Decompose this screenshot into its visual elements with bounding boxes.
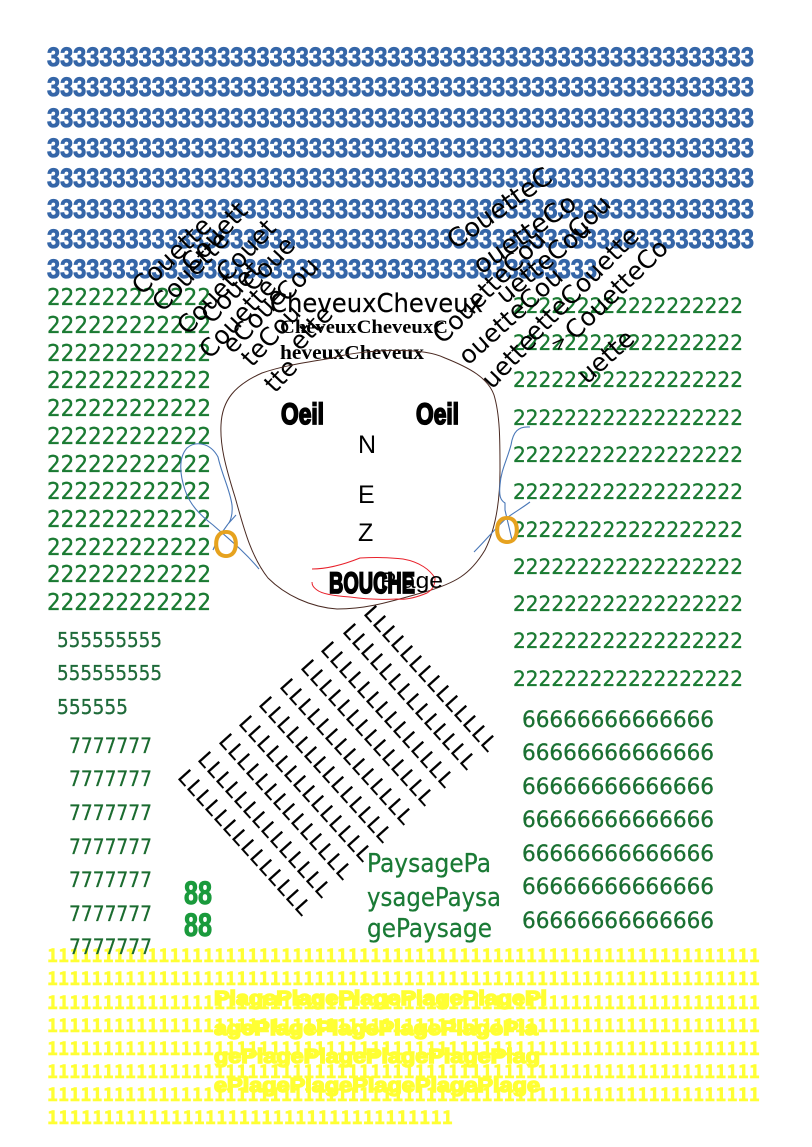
heading: Cheveux: [270, 289, 483, 364]
text block: fives: [57, 628, 162, 719]
heading: Cheveux: CheveuxCheveux: [270, 289, 483, 319]
text block: left green twos: 222222222222: [47, 396, 211, 422]
rotated text: left Couette: Couette: [126, 211, 217, 300]
label: left eye: Oeil: [281, 398, 324, 431]
rotated text: left Couette: Couett: [175, 196, 254, 277]
text block: sixes: [522, 708, 714, 934]
text block: left green twos: 222222222222: [47, 479, 211, 505]
text block: sevens: 7777777: [69, 868, 152, 892]
text block: sixes: 66666666666666: [522, 741, 714, 766]
text block: yellow Plage: ePlagePlagePlagePlagePlage: [214, 1075, 540, 1097]
text block: left green twos: 222222222222: [47, 590, 211, 616]
text block: sevens: 7777777: [69, 935, 152, 959]
rotated text: right Couette: >: [547, 330, 572, 356]
text block: blue threes: [47, 42, 754, 284]
text block: yellow ones: 1111111111111111111111111111111111111111111111111111111111111111: [47, 1011, 760, 1038]
text block: yellow Plage: [214, 988, 547, 1097]
text block: sevens: 7777777: [69, 734, 152, 758]
rotated text: right Couette: uette: [475, 326, 542, 394]
icon: left ear: [181, 444, 259, 569]
icon: right ear: [474, 427, 530, 552]
rotated text: block of L letters: LLLLLLLLLLLLLL: [296, 655, 440, 810]
text block: left green twos: 222222222222: [47, 368, 211, 394]
rotated text: left Couette: ette: [283, 299, 339, 356]
label: Plage over mouth: Plage: [380, 568, 443, 593]
text block: sevens: 7777777: [69, 902, 152, 926]
text block: eights: 88: [184, 907, 212, 943]
text block: yellow ones: 1111111111111111111111111111111111111111111111111111111111111111: [47, 1034, 760, 1061]
text block: yellow Plage: agePlagePlagePlagePlagePla: [214, 1018, 539, 1040]
text block: fives: 555555: [57, 695, 128, 719]
text block: left green twos: 222222222222: [47, 341, 211, 367]
rotated text: block of L letters: LLLLLLLLLLLLLL: [338, 619, 482, 774]
text block: right green twos: 222222222222222222: [513, 480, 743, 505]
text block: right green twos: 222222222222222222: [513, 368, 743, 393]
heading: Cheveux: heveuxCheveux: [280, 342, 424, 364]
text block: eights: [184, 875, 212, 943]
rotated text: left Couette: Cou: [270, 252, 325, 307]
text block: right green twos: 222222222222222222: [513, 629, 743, 654]
rotated text: block of L letters: LLLLLLLLLLLLLL: [193, 747, 337, 902]
rotated text: block of L letters: [173, 601, 503, 920]
rotated text: left Couette: Couette: [146, 225, 235, 317]
text block: Paysage: ysagePaysa: [367, 883, 501, 913]
icon: left orange ring: O: [213, 524, 239, 566]
text block: left green twos: 222222222222: [47, 424, 211, 450]
rotated text: block of L letters: LLLLLLLLLLLLLL: [234, 711, 378, 866]
text block: sixes: 66666666666666: [522, 875, 714, 900]
text block: left green twos: [47, 285, 211, 616]
label: nose: Z: [358, 519, 373, 547]
text block: sixes: 66666666666666: [522, 909, 714, 934]
rotated text: left Couette: eCoue: [216, 281, 292, 359]
text block: yellow ones: 1111111111111111111111111111111111111111111111111111111111111111: [47, 1080, 760, 1107]
text block: sixes: 66666666666666: [522, 708, 714, 733]
text block: sevens: 7777777: [69, 835, 152, 859]
text block: yellow ones: [47, 941, 760, 1130]
text block: fives: 555555555: [57, 661, 162, 685]
text block: right green twos: 222222222222222222: [513, 331, 743, 356]
text block: eights: 88: [184, 875, 212, 911]
text block: left green twos: 222222222222: [47, 285, 211, 311]
text block: right green twos: 222222222222222222: [513, 406, 743, 431]
heading: Cheveux: CheveuxCheveuxC: [280, 317, 448, 338]
text block: right green twos: [513, 294, 743, 692]
mouth outline: [312, 558, 435, 599]
rotated text: right Couette: [427, 162, 674, 394]
text block: left green twos: 222222222222: [47, 452, 211, 478]
rotated text: left Couette: [126, 196, 339, 398]
text block: yellow Plage: gePlagePlagePlagePlagePlag: [214, 1046, 540, 1068]
rotated text: left Couette: tte: [258, 353, 303, 398]
text block: left green twos: 222222222222: [47, 535, 211, 561]
text block: sixes: 66666666666666: [522, 808, 714, 833]
rotated text: block of L letters: LLLLLLLLLLLLLL: [173, 765, 317, 920]
text block: Paysage: [367, 849, 501, 944]
rotated text: block of L letters: LLLLLLLLLLLLLL: [275, 674, 419, 829]
text block: sevens: 7777777: [69, 767, 152, 791]
text block: right green twos: 222222222222222222: [513, 518, 743, 543]
text block: Paysage: PaysagePa: [367, 849, 491, 879]
rotated text: block of L letters: LLLLLLLLLLLLLL: [359, 601, 503, 756]
rotated text: block of L letters: LLLLLLLLLLLLLL: [254, 692, 398, 847]
text block: left green twos: 222222222222: [47, 507, 211, 533]
text block: yellow ones: 1111111111111111111111111111111111111111111111111111111111111111: [47, 1057, 760, 1084]
text block: yellow ones: 1111111111111111111111111111111111111111111111111111111111111111: [47, 941, 760, 968]
rotated text: left Couette: Coue: [236, 231, 301, 297]
text block: right green twos: 222222222222222222: [513, 592, 743, 617]
rotated text: right Couette: uetteCou: [490, 214, 597, 310]
label: right eye: Oeil: [416, 398, 459, 431]
rotated text: left Couette: Couet: [171, 266, 243, 340]
label: nose: E: [358, 481, 375, 509]
rotated text: left Couette: Couet: [210, 213, 282, 287]
text block: yellow Plage: PlagePlagePlagePlagePlagePl: [214, 988, 547, 1010]
rotated text: left Couette: Couette: [193, 272, 282, 364]
rotated text: right Couette: CouetteCo: [559, 233, 674, 345]
label: mouth: BOUCHE: [329, 567, 415, 600]
text block: right green twos: 222222222222222222: [513, 667, 743, 692]
rotated text: right Couette: ouetteCo: [468, 188, 582, 281]
rotated text: right Couette: Cou: [562, 189, 617, 244]
text block: blue threes: 333333333333333333333333333333333333333333: [47, 254, 597, 284]
text block: right green twos: 222222222222222222: [513, 294, 743, 319]
rotated text: right Couette: etteCouette: [519, 221, 645, 347]
icon: right orange ring: O: [494, 510, 520, 552]
text block: Paysage: gePaysage: [367, 914, 492, 944]
text block: yellow ones: 1111111111111111111111111111111111111111111111111111111111111111: [47, 964, 760, 991]
text block: yellow ones: 1111111111111111111111111111111111111111111111111111111111111111: [47, 988, 760, 1015]
rotated text: left Couette: teCou: [235, 298, 307, 372]
text block: sixes: 66666666666666: [522, 842, 714, 867]
rotated text: right Couette: CouetteC: [442, 162, 558, 256]
rotated text: block of L letters: LLLLLLLLLLLLLL: [214, 729, 358, 884]
text block: sevens: [69, 734, 152, 959]
rotated text: block of L letters: LLLLLLLLLLLLLL: [316, 637, 460, 792]
label: nose: N: [358, 431, 376, 459]
face outline: [221, 350, 500, 609]
rotated text: right Couette: CouetteCou: [427, 224, 552, 349]
text block: sevens: 7777777: [69, 801, 152, 825]
rotated text: left Couette: Couet: [195, 255, 267, 329]
text block: right green twos: 222222222222222222: [513, 443, 743, 468]
text block: left green twos: 222222222222: [47, 562, 211, 588]
rotated text: right Couette: ouetteCou: [453, 262, 569, 370]
text block: left green twos: 222222222222: [47, 313, 211, 339]
text block: right green twos: 222222222222222222: [513, 555, 743, 580]
label: nose: [358, 431, 376, 547]
text block: sixes: 66666666666666: [522, 775, 714, 800]
text block: yellow ones: 111111111111111111111111111111111111: [47, 1103, 453, 1130]
text block: fives: 555555555: [57, 628, 162, 652]
rotated text: right Couette: uette: [572, 324, 640, 389]
